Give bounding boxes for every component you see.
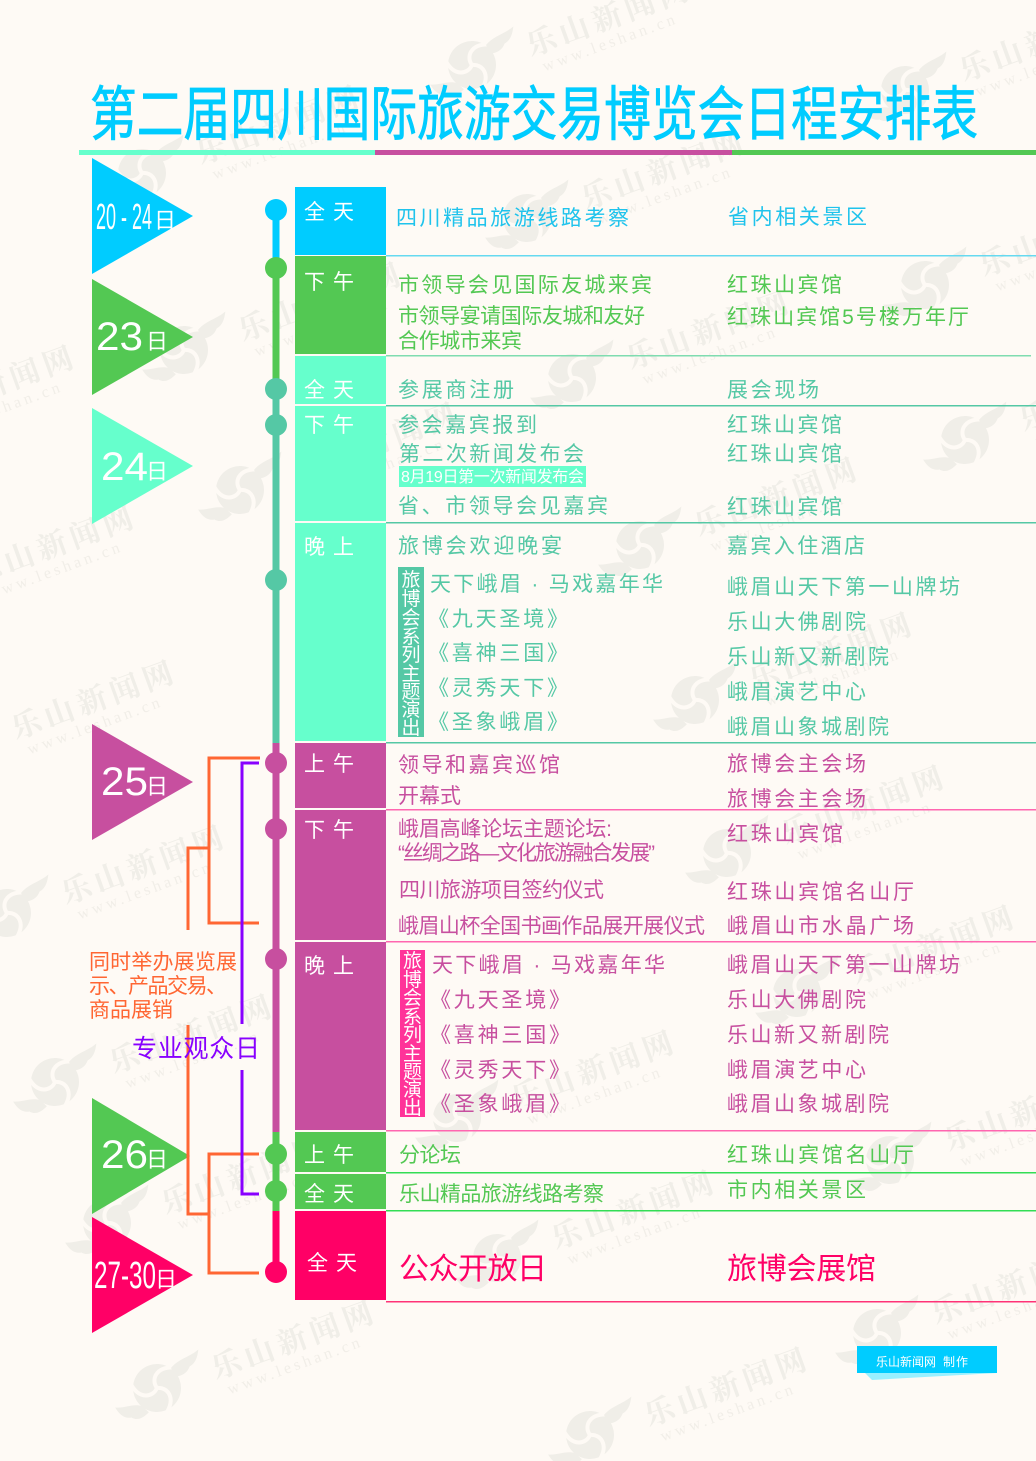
- text: 乐山新闻网: [4, 648, 178, 748]
- 24 day rows: 《圣象峨眉》: [428, 711, 568, 734]
- text: www.leshan.cn: [175, 1168, 315, 1233]
- text: 乐山新闻网: [619, 278, 793, 378]
- 20-24 day rows: 四川精品旅游线路考察: [396, 207, 629, 230]
- time block labels: 全天: [307, 1252, 357, 1275]
- text: www.leshan.cn: [525, 1063, 665, 1128]
- text: www.leshan.cn: [75, 858, 215, 923]
- time blocks: [295, 187, 386, 1300]
- vertical tag: series shows, aqua: 会: [401, 607, 421, 629]
- vertical tag: series shows, pink: 题: [403, 1062, 422, 1083]
- vertical tag: series shows, aqua: 演: [401, 699, 421, 721]
- 24 day rows: 乐山大佛剧院: [727, 611, 866, 634]
- date flag: 20-24: 日: [154, 208, 176, 233]
- date flag: 24: [92, 408, 193, 524]
- 25 day rows: 《九天圣境》: [430, 989, 570, 1012]
- 25 day rows: 峨眉山杯全国书画作品展开展仪式: [398, 915, 705, 938]
- 24 day rows: 参会嘉宾报到: [398, 414, 537, 437]
- 25 day rows: 乐山新又新剧院: [727, 1024, 889, 1047]
- text: 乐山新闻网: [687, 445, 861, 545]
- 23 day rows: 红珠山宾馆: [727, 274, 842, 297]
- 23 day rows: 市领导会见国际友城来宾: [398, 274, 652, 297]
- 24 day rows: 展会现场: [727, 379, 819, 402]
- 24 day rows: 红珠山宾馆: [727, 414, 842, 437]
- time block labels: 全天: [304, 379, 354, 402]
- 23 day rows: [398, 274, 969, 353]
- 25 day rows: 峨眉演艺中心: [727, 1059, 866, 1082]
- 25 day rows: 《喜神三国》: [430, 1024, 570, 1047]
- 24 day rows: 参展商注册: [398, 379, 514, 402]
- 26 day rows: 乐山精品旅游线路考察: [399, 1183, 604, 1206]
- 24 day rows: 省、市领导会见嘉宾: [398, 495, 608, 518]
- 27-30 day row: [399, 1253, 876, 1286]
- text: www.leshan.cn: [308, 435, 448, 500]
- label: exhibition note: [89, 951, 237, 1022]
- vertical tag: series shows, aqua: 系: [401, 626, 421, 648]
- 25 day rows: 四川旅游项目签约仪式: [399, 879, 604, 902]
- date flag: 27-30: 27-30: [94, 1255, 156, 1297]
- text: 乐山新闻网: [102, 982, 276, 1082]
- date flag: 20-24: [92, 158, 193, 274]
- 25 day rows: 天下峨眉 · 马戏嘉年华: [432, 954, 665, 977]
- 20-24 day rows: [396, 206, 867, 230]
- time block labels: 全天: [304, 1183, 354, 1206]
- 25 day rows: “丝绸之路—文化旅游融合发展”: [398, 842, 655, 865]
- 23 day rows: 市领导宴请国际友城和友好: [398, 305, 645, 328]
- vertical tag: series shows, aqua: 主: [401, 663, 421, 685]
- date flag: 24: 24: [101, 445, 148, 489]
- credit badge: 乐山新闻网: [876, 1354, 936, 1369]
- text: www.leshan.cn: [210, 118, 350, 183]
- 26 day rows: 市内相关景区: [727, 1179, 866, 1202]
- text: www.leshan.cn: [565, 1203, 705, 1268]
- text: www.leshan.cn: [795, 798, 935, 863]
- 24 day rows: 峨眉山象城剧院: [727, 716, 889, 739]
- text: 乐山新闻网: [54, 813, 228, 913]
- vertical tag: series shows, pink: [400, 950, 425, 1119]
- 25 day rows: 峨眉山市水晶广场: [727, 915, 914, 938]
- vertical tag: series shows, aqua: 题: [401, 682, 421, 703]
- text: www.leshan.cn: [658, 1380, 798, 1445]
- time block labels: 晚上: [304, 536, 354, 559]
- date flag: 23: [92, 279, 193, 395]
- time block labels: 下午: [304, 819, 354, 842]
- credit badge: 制作: [943, 1355, 968, 1369]
- time block labels: [304, 201, 357, 1275]
- 24 day rows: 《九天圣境》: [428, 608, 568, 631]
- vertical tag: series shows, pink: 系: [403, 1006, 422, 1028]
- text: 乐山新闻网: [544, 1158, 718, 1258]
- time block labels: 晚上: [304, 955, 354, 978]
- date flag: 27-30: [92, 1217, 193, 1333]
- press conference note: 8月19日第一次新闻发布会: [401, 468, 584, 486]
- date flag: 26: 26: [101, 1133, 148, 1177]
- 23 day rows: 红珠山宾馆5号楼万年厅: [727, 306, 969, 329]
- 24 day rows: 红珠山宾馆: [727, 443, 842, 466]
- time block labels: 上午: [304, 1144, 354, 1167]
- label: exhibition note: 示、产品交易、: [89, 975, 227, 998]
- date flag: 23: 日: [146, 329, 168, 354]
- 24 day rows: 峨眉演艺中心: [727, 681, 866, 704]
- 26 day rows: 红珠山宾馆名山厅: [727, 1144, 914, 1167]
- 20-24 day rows: 省内相关景区: [728, 206, 867, 229]
- vertical tag: series shows, aqua: [398, 567, 424, 739]
- time block labels: 全天: [304, 201, 354, 224]
- text: 乐山新闻网: [231, 250, 405, 350]
- text: 乐山新闻网: [637, 1335, 811, 1435]
- vertical tag: series shows, aqua: 列: [401, 644, 421, 666]
- date flag: 23: 23: [96, 315, 143, 359]
- time block labels: 下午: [304, 414, 354, 437]
- text: www.leshan.cn: [708, 490, 848, 555]
- 25 day rows: 旅博会主会场: [727, 753, 866, 776]
- 24 day rows: 旅博会欢迎晚宴: [398, 535, 562, 558]
- text: 乐山新闻网: [287, 390, 461, 490]
- date flag: 26: 日: [146, 1147, 168, 1172]
- 24 day rows: [398, 379, 960, 739]
- 27-30 day row: 旅博会展馆: [727, 1253, 876, 1286]
- 23 day rows: 合作城市来宾: [398, 330, 522, 353]
- title underline: [79, 150, 1036, 155]
- bracket: professional visitor days: [242, 763, 259, 1194]
- bracket: exhibition days: [188, 758, 260, 1273]
- text: 乐山新闻网: [574, 118, 748, 218]
- date flag: 25: 25: [101, 760, 148, 804]
- 24 day rows: 《灵秀天下》: [428, 677, 568, 700]
- 25 day rows: 红珠山宾馆名山厅: [727, 881, 914, 904]
- 24 day rows: 天下峨眉 · 马戏嘉年华: [430, 573, 663, 596]
- 25 day rows: 《圣象峨眉》: [430, 1093, 570, 1116]
- text: www.leshan.cn: [252, 295, 392, 360]
- 24 day rows: 峨眉山天下第一山牌坊: [727, 576, 960, 599]
- label: exhibition note: 同时举办展览展: [89, 951, 237, 974]
- text: 乐山新闻网: [204, 1288, 378, 1388]
- text: www.leshan.cn: [540, 10, 680, 75]
- text: 乐山新闻网: [742, 600, 916, 700]
- date flag: 26: [92, 1098, 190, 1214]
- vertical tag: series shows, pink: 旅: [403, 950, 422, 972]
- vertical tag: series shows, pink: 会: [403, 987, 422, 1009]
- vertical tag: series shows, aqua: 旅: [401, 569, 421, 591]
- 24 day rows: 红珠山宾馆: [727, 496, 842, 519]
- 24 day rows: 乐山新又新剧院: [727, 646, 889, 669]
- text: www.leshan.cn: [865, 938, 1005, 1003]
- vertical tag: series shows, pink: 主: [403, 1043, 422, 1065]
- 25 day rows: 峨眉山象城剧院: [727, 1093, 889, 1116]
- vertical tag: series shows, aqua: 博: [401, 588, 421, 610]
- date flag: 27-30: 日: [155, 1267, 177, 1292]
- 24 day rows: 嘉宾入住酒店: [727, 535, 865, 558]
- text: 乐山新闻网: [189, 73, 363, 173]
- vertical tag: series shows, pink: 列: [403, 1024, 422, 1046]
- text: 乐山新闻网: [774, 753, 948, 853]
- 24 day rows: 第二次新闻发布会: [399, 443, 584, 466]
- date flag: 24: 日: [146, 459, 168, 484]
- 26 day rows: 分论坛: [399, 1144, 461, 1167]
- time block labels: 下午: [304, 271, 354, 294]
- vertical tag: series shows, pink: 演: [403, 1079, 422, 1101]
- vertical tag: series shows, pink: 博: [403, 969, 422, 991]
- 25 day rows: 峨眉山天下第一山牌坊: [727, 954, 960, 977]
- 27-30 day row: 公众开放日: [399, 1253, 547, 1286]
- label: exhibition note: 商品展销: [89, 999, 173, 1022]
- vertical tag: series shows, aqua: 出: [401, 717, 421, 739]
- text: www.leshan.cn: [763, 645, 903, 710]
- 25 day rows: 领导和嘉宾巡馆: [398, 754, 560, 777]
- 25 day rows: 开幕式: [398, 785, 461, 808]
- 24 day rows: 《喜神三国》: [428, 642, 568, 665]
- date flag: 25: 日: [146, 774, 168, 799]
- 25 day rows: [398, 753, 960, 1116]
- text: 乐山新闻网: [504, 1018, 678, 1118]
- row dividers: [386, 255, 1036, 1302]
- date flag: 20-24: 20 - 24: [96, 196, 152, 237]
- 25 day rows: 峨眉高峰论坛主题论坛:: [398, 818, 612, 841]
- 25 day rows: 乐山大佛剧院: [727, 989, 866, 1012]
- 25 day rows: 旅博会主会场: [727, 788, 866, 811]
- 25 day rows: 红珠山宾馆: [727, 823, 843, 846]
- label: professional visitor day: 专业观众日: [132, 1035, 260, 1063]
- text: 乐山新闻网: [844, 893, 1018, 993]
- 25 day rows: 《灵秀天下》: [430, 1059, 570, 1082]
- text: www.leshan.cn: [225, 1333, 365, 1398]
- time block labels: 上午: [304, 753, 354, 776]
- 26 day rows: [399, 1144, 914, 1206]
- text: www.leshan.cn: [595, 163, 735, 228]
- credit badge: [857, 1346, 997, 1380]
- date flag: 25: [92, 724, 193, 840]
- text: 乐山新闻网: [154, 1123, 328, 1223]
- text: www.leshan.cn: [640, 323, 780, 388]
- text: www.leshan.cn: [123, 1027, 263, 1092]
- timeline: [265, 199, 287, 1283]
- text: www.leshan.cn: [25, 693, 165, 758]
- vertical tag: series shows, pink: 出: [403, 1097, 422, 1119]
